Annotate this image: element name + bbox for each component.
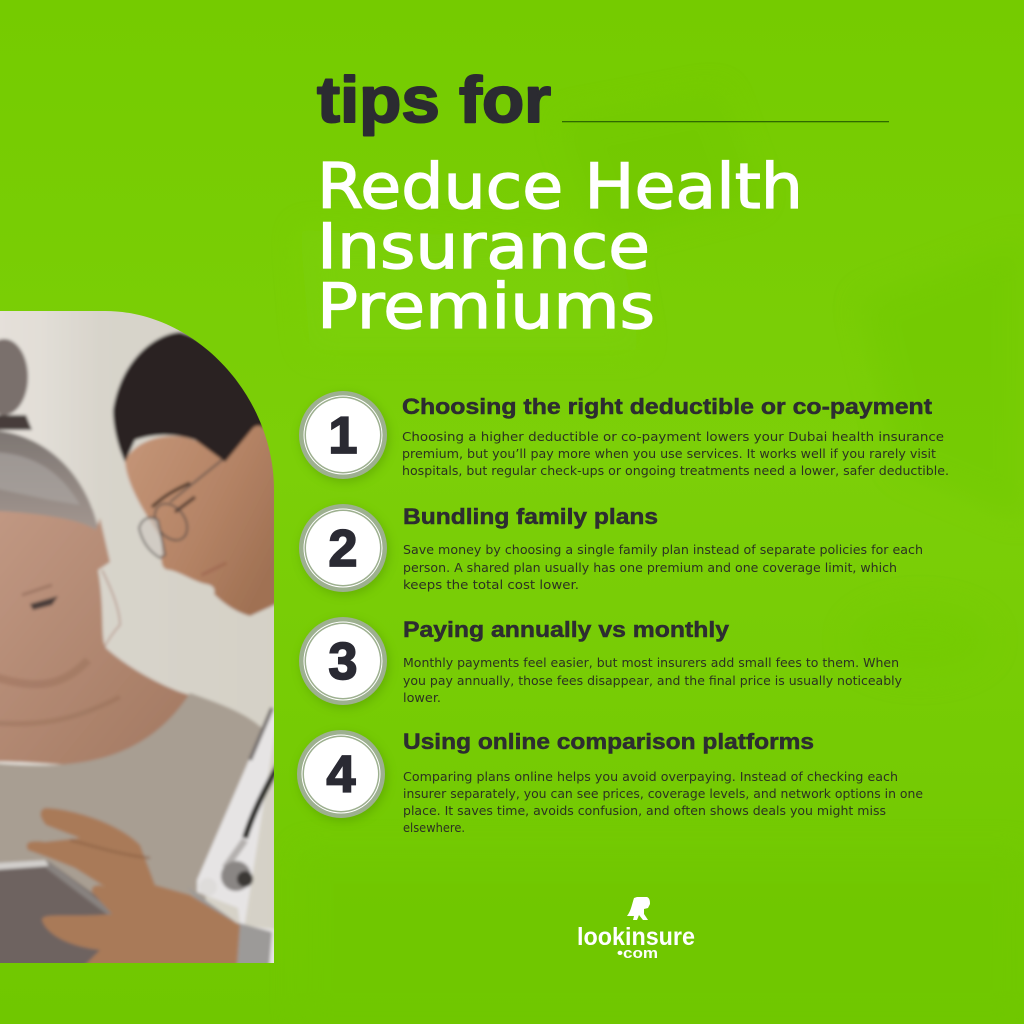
number badge 4 xyxy=(297,730,387,821)
heading 3: Paying annually vs monthly xyxy=(403,617,730,642)
glasses xyxy=(139,460,222,558)
body 3 xyxy=(403,655,903,705)
heading 4: Using online comparison platforms xyxy=(403,729,814,754)
body 1: Choosing a higher deductible or co-payment lowers your Dubai health insurance xyxy=(402,429,944,444)
tip 4 xyxy=(297,729,923,835)
sweater xyxy=(0,692,263,900)
title: tips for: tips for xyxy=(317,63,551,136)
title: reduce health insurance premiums xyxy=(317,150,803,343)
body 4: insurer separately, you can see prices, coverage levels, and network options in one xyxy=(403,786,923,801)
body 1: premium, but you’ll pay more when you use services. It works well if you rarely visit xyxy=(402,446,936,461)
logo wordmark: lookinsure xyxy=(577,923,695,951)
number badge 1: 1 xyxy=(329,407,357,465)
logo wordmark xyxy=(577,923,695,962)
number badge 3: 3 xyxy=(329,633,357,691)
title: reduce health insurance premiums: Reduce Health xyxy=(317,150,803,223)
number badge 2 xyxy=(299,504,389,595)
older woman's hair xyxy=(0,339,104,545)
older woman's face and neck xyxy=(0,510,190,765)
heading 1: Choosing the right deductible or co-payment xyxy=(402,394,933,419)
body 4: Comparing plans online helps you avoid overpaying. Instead of checking each xyxy=(403,769,898,784)
logo wordmark: •com xyxy=(617,945,658,962)
body 4: elsewhere. xyxy=(403,820,465,835)
doctor's face xyxy=(125,426,285,616)
title: reduce health insurance premiums: Insurance xyxy=(317,210,650,283)
number badge 2: 2 xyxy=(329,520,357,578)
icon: dinosaur mascot xyxy=(627,897,650,920)
body 2: person. A shared plan usually has one premium and one coverage limit, which xyxy=(403,560,897,575)
photo: doctor and older patient with tablet xyxy=(0,300,285,980)
number badge 1 xyxy=(299,391,389,482)
number badge 3 xyxy=(299,617,389,708)
body 1 xyxy=(402,429,949,478)
body 4 xyxy=(403,769,923,835)
body 4: place. It saves time, avoids confusion, and often shows deals you might miss xyxy=(403,803,886,818)
tablet xyxy=(0,861,107,963)
body 3: lower. xyxy=(403,690,441,705)
body 2 xyxy=(403,542,923,592)
logo: lookinsure xyxy=(577,897,695,962)
tip 3 xyxy=(299,617,903,708)
tip 1 xyxy=(299,391,949,482)
body 1: hospitals, but regular check-ups or ongoing treatments need a lower, safer deductible. xyxy=(402,463,949,478)
doctor's coat and stethoscope xyxy=(194,706,274,963)
body 2: keeps the total cost lower. xyxy=(403,577,579,592)
title: reduce health insurance premiums: Premiums xyxy=(317,270,655,343)
body 3: you pay annually, those fees disappear, and the final price is usually noticeably xyxy=(403,673,903,688)
tip 2 xyxy=(299,504,923,595)
number badge 4: 4 xyxy=(327,746,356,804)
body 2: Save money by choosing a single family plan instead of separate policies for each xyxy=(403,542,923,557)
hands xyxy=(27,808,240,980)
body 3: Monthly payments feel easier, but most insurers add small fees to them. When xyxy=(403,655,899,670)
doctor's hair xyxy=(113,332,270,462)
heading 2: Bundling family plans xyxy=(403,504,658,529)
